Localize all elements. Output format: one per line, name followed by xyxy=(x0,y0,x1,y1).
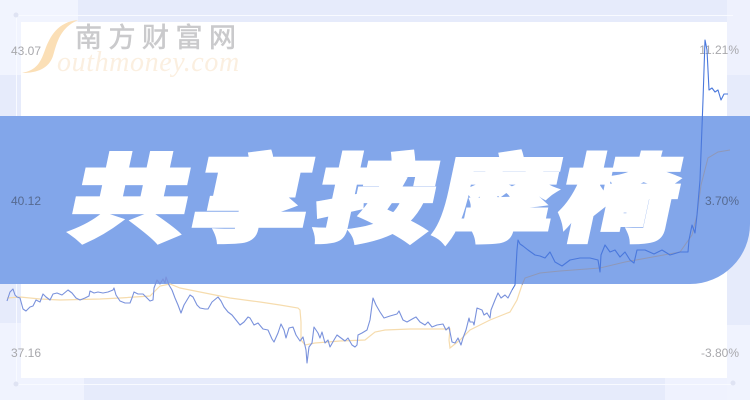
axis label: 43.07: 43.07 xyxy=(11,44,41,58)
main price line xyxy=(7,277,512,363)
title band xyxy=(0,116,750,284)
watermark logo xyxy=(22,20,242,78)
title text: 共享按摩椅 xyxy=(62,148,689,253)
watermark logo: 南方财富网 xyxy=(75,23,242,53)
axis label: -3.80%: -3.80% xyxy=(701,346,739,360)
axis label: 37.16: 37.16 xyxy=(11,346,41,360)
main price line over band xyxy=(512,40,728,290)
axis label: 3.70%: 3.70% xyxy=(705,194,739,208)
axis label: 40.12: 40.12 xyxy=(11,194,41,208)
average price line xyxy=(7,284,522,348)
average line over band xyxy=(522,150,730,285)
axis label: 11.21%: 11.21% xyxy=(699,43,739,57)
watermark logo: outhmoney.com xyxy=(57,47,240,78)
